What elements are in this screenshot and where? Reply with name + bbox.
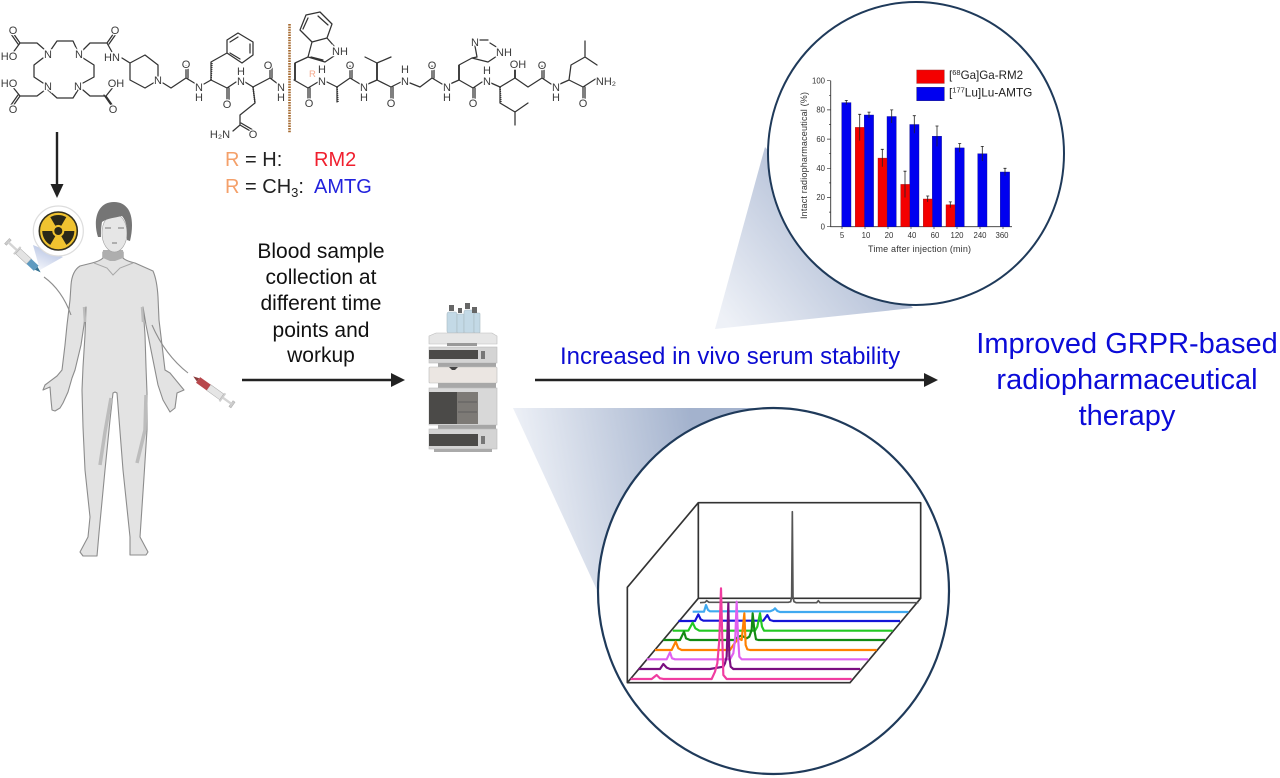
y axis labels (812, 76, 826, 231)
chemical structure: DOTA-peptide conjugate: N (277, 82, 285, 94)
chemical structure: DOTA-peptide conjugate: O (538, 60, 547, 72)
chemical structure: DOTA-peptide conjugate: O (469, 98, 478, 110)
chart: stacked radiochromatograms (627, 503, 921, 683)
x axis labels: 240 (973, 231, 987, 240)
chemical structure: DOTA-peptide conjugate: N (195, 82, 203, 94)
cleavage line (288, 24, 291, 133)
chemical structure: DOTA-peptide conjugate: N (74, 81, 82, 93)
y axis labels: 60 (816, 135, 826, 144)
text: blood sample collection: Blood sample (257, 240, 385, 263)
icon: human patient (43, 202, 184, 556)
chemical structure: DOTA-peptide conjugate: N (75, 49, 83, 61)
bar chart: intact radiopharmaceutical (827, 81, 1012, 229)
chart legend: Ga]Ga-RM2 (961, 69, 1023, 82)
y axis labels: 100 (812, 76, 826, 85)
chart legend: [ (949, 69, 952, 82)
x axis title: Time after injection (min) (868, 244, 971, 254)
chemical structure: DOTA-peptide conjugate: N (44, 49, 52, 61)
arrow: molecule to patient (50, 132, 64, 198)
chemical structure: DOTA-peptide conjugate: NH₂ (596, 76, 616, 88)
conclusion text: Improved GRPR-based (976, 328, 1278, 360)
chemical structure: DOTA-peptide conjugate: N (471, 37, 479, 49)
text: blood sample collection: points and (273, 319, 369, 342)
chemical structure: DOTA-peptide conjugate: O (182, 59, 191, 71)
chart legend: 68 (952, 68, 961, 77)
chemical structure: DOTA-peptide conjugate: HO (1, 78, 18, 90)
callout wedge: to stability chart (715, 147, 913, 329)
chemical structure: DOTA-peptide conjugate: N (443, 82, 451, 94)
chemical structure: DOTA-peptide conjugate: NH (332, 46, 348, 58)
R group legend: RM2 (314, 149, 356, 171)
chemical structure: DOTA-peptide conjugate: HO (1, 51, 18, 63)
chemical structure: DOTA-peptide conjugate: O (111, 25, 120, 37)
chemical structure: DOTA-peptide conjugate (1, 12, 616, 141)
chemical structure: DOTA-peptide conjugate: H (443, 92, 451, 104)
chemical structure: DOTA-peptide conjugate: O (579, 98, 588, 110)
chemical structure: DOTA-peptide conjugate: OH (108, 78, 124, 90)
text: blood sample collection: collection at (266, 266, 377, 289)
chemical structure: DOTA-peptide conjugate: N (154, 75, 162, 87)
text: increased in vivo serum stability: Increased in vivo serum stability (560, 343, 900, 370)
chemical structure: DOTA-peptide conjugate: N (483, 76, 491, 88)
text: blood sample collection: different time (260, 292, 382, 315)
chemical structure: DOTA-peptide conjugate: O (346, 60, 355, 72)
chemical structure: DOTA-peptide conjugate: O (223, 99, 232, 111)
text: blood sample collection (257, 240, 385, 367)
icon: injection syringe with tube (4, 237, 71, 315)
R group legend: : (298, 176, 304, 198)
text: blood sample collection: workup (286, 344, 355, 367)
chemical structure: DOTA-peptide conjugate: N (401, 76, 409, 88)
chemical structure: DOTA-peptide conjugate: N (552, 82, 560, 94)
chemical structure: DOTA-peptide conjugate: NH (496, 47, 512, 59)
chemical structure: DOTA-peptide conjugate: O (387, 98, 396, 110)
y axis labels: 0 (821, 222, 826, 231)
y axis labels: 80 (816, 106, 826, 115)
chemical structure: DOTA-peptide conjugate: N (237, 76, 245, 88)
x axis labels: 10 (862, 231, 871, 240)
icon: blood sampling syringe with tube (152, 325, 236, 409)
chemical structure: DOTA-peptide conjugate: O (428, 60, 437, 72)
chemical structure: DOTA-peptide conjugate: N (318, 76, 326, 88)
chart legend: Lu]Lu-AMTG (965, 86, 1032, 100)
R group legend: 3 (291, 185, 298, 200)
conclusion text: therapy (1079, 400, 1176, 432)
icon: radiation callout (33, 206, 83, 270)
x axis labels: 20 (885, 231, 894, 240)
R group legend: R = CH (225, 176, 291, 198)
x axis labels: 360 (995, 231, 1009, 240)
chemical structure: DOTA-peptide conjugate: H (277, 92, 285, 104)
x axis labels: 40 (908, 231, 917, 240)
panel: chromatogram circle (598, 408, 949, 774)
chemical structure: DOTA-peptide conjugate: H (401, 64, 409, 76)
chemical structure: DOTA-peptide conjugate: H (318, 64, 326, 76)
x axis labels: 60 (931, 231, 940, 240)
chemical structure: DOTA-peptide conjugate: O (249, 129, 258, 141)
arrow: patient to HPLC (242, 373, 405, 387)
chemical structure: DOTA-peptide conjugate: O (9, 104, 18, 116)
chart legend: [ (949, 86, 952, 100)
R group legend (225, 149, 372, 200)
chemical structure: DOTA-peptide conjugate: H (237, 66, 245, 78)
chemical structure: DOTA-peptide conjugate: H (552, 92, 560, 104)
callout wedge: to chromatogram (513, 408, 760, 640)
chemical structure: DOTA-peptide conjugate: H (195, 92, 203, 104)
y axis labels: 20 (816, 193, 826, 202)
chemical structure: DOTA-peptide conjugate: O (305, 98, 314, 110)
chemical structure: DOTA-peptide conjugate: H (360, 92, 368, 104)
chemical structure: DOTA-peptide conjugate: HN (104, 52, 120, 64)
conclusion text (976, 328, 1278, 432)
y axis labels: 40 (816, 164, 826, 173)
chemical structure: DOTA-peptide conjugate: OH (510, 59, 526, 71)
chemical structure: DOTA-peptide conjugate: R (309, 69, 316, 80)
x axis labels (840, 231, 1009, 240)
R group legend: AMTG (314, 176, 372, 198)
conclusion text: radiopharmaceutical (996, 364, 1258, 396)
chemical structure: DOTA-peptide conjugate: O (9, 25, 18, 37)
chemical structure: DOTA-peptide conjugate: O (264, 60, 273, 72)
chemical structure: DOTA-peptide conjugate: N (44, 81, 52, 93)
chart legend: 177 (952, 86, 965, 95)
chemical structure: DOTA-peptide conjugate: H₂N (210, 129, 230, 141)
chemical structure: DOTA-peptide conjugate: O (109, 104, 118, 116)
y axis title: Intact radiopharmaceutical (%) (799, 92, 809, 219)
chemical structure: DOTA-peptide conjugate: N (360, 82, 368, 94)
arrow: HPLC to outcome (535, 373, 938, 387)
x axis labels: 5 (840, 231, 845, 240)
panel: stability bar chart circle (768, 2, 1064, 305)
icon: HPLC instrument stack (429, 303, 497, 452)
chart legend (917, 68, 1032, 101)
chemical structure: DOTA-peptide conjugate: H (483, 65, 491, 77)
R group legend: R = H: (225, 149, 282, 171)
x axis labels: 120 (950, 231, 964, 240)
